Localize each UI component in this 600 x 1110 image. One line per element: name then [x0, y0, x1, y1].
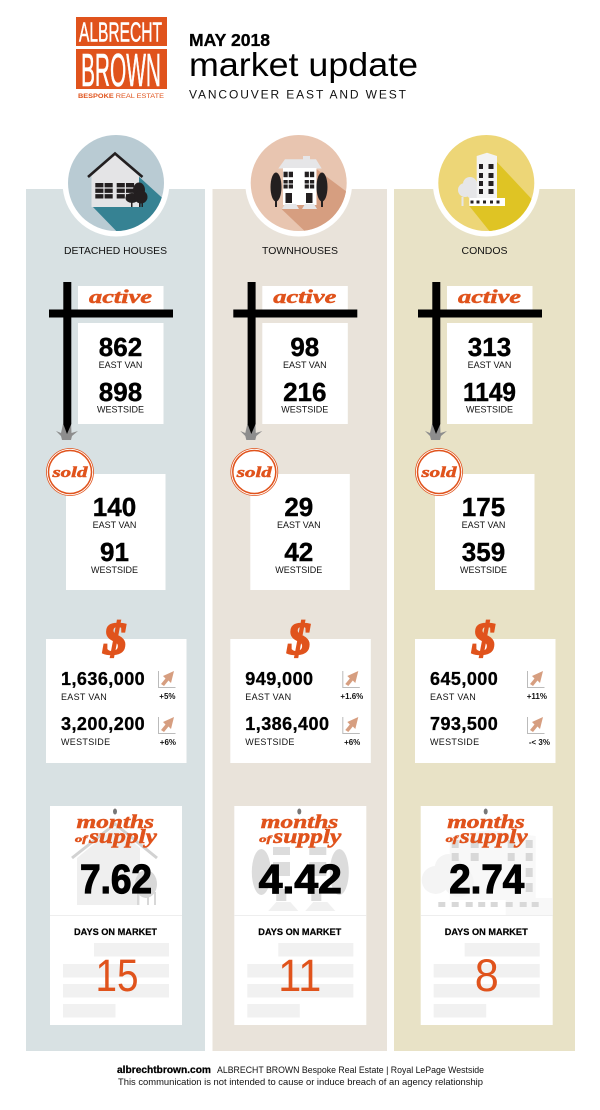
supply and days on market: detached houses — [50, 806, 182, 1025]
supply and days on market: condos: of — [446, 834, 459, 844]
prices: detached houses: $ — [102, 613, 126, 664]
prices: townhouses: 949,000 — [245, 669, 314, 689]
logo: BESPOKE REAL ESTATE — [78, 93, 165, 100]
sold listings: condos: EAST VAN — [462, 520, 505, 530]
panel: detached houses background — [26, 189, 205, 1051]
heading: condos: CONDOS — [462, 245, 508, 257]
sold listings: condos — [416, 448, 534, 590]
active listings: condos: EAST VAN — [468, 360, 511, 370]
logo: ALBRECHT — [79, 16, 162, 48]
active listings: townhouses — [233, 282, 357, 440]
active listings: condos: WESTSIDE — [466, 404, 513, 414]
title block — [189, 30, 418, 102]
prices: condos: EAST VAN — [430, 692, 476, 702]
prices: condos: 793,500 — [430, 714, 498, 734]
supply and days on market: condos: 2.74 — [449, 856, 524, 902]
supply and days on market: townhouses: 11 — [278, 950, 321, 1001]
active listings: condos — [418, 282, 542, 440]
active listings: detached houses: 862 — [99, 332, 142, 362]
heading: detached houses: DETACHED HOUSES — [64, 245, 167, 257]
active listings: townhouses: active — [273, 287, 337, 308]
sold listings: townhouses — [231, 448, 350, 590]
icon: detached house — [62, 130, 170, 240]
icon: condo tower — [433, 130, 540, 238]
footer: ALBRECHT BROWN Bespoke Real Estate | Royal LePage Westside — [217, 1065, 484, 1076]
heading: townhouses: TOWNHOUSES — [262, 245, 338, 257]
prices: townhouses: +6% — [344, 738, 360, 747]
sold listings: townhouses: WESTSIDE — [275, 565, 322, 575]
active listings: detached houses: EAST VAN — [99, 360, 142, 370]
prices: townhouses: 1,386,400 — [245, 714, 329, 734]
sold listings: condos: 175 — [462, 492, 505, 522]
prices: condos: $ — [472, 613, 496, 664]
text: BROWN — [81, 44, 161, 96]
footer: albrechtbrown.com — [117, 1065, 211, 1076]
sold listings: detached houses: EAST VAN — [93, 520, 136, 530]
sold listings: detached houses — [46, 448, 166, 590]
supply and days on market: detached houses: 15 — [96, 950, 138, 1001]
supply and days on market: condos: DAYS ON MARKET — [445, 927, 528, 937]
prices: detached houses: +6% — [160, 738, 176, 747]
sold listings: detached houses: 140 — [93, 492, 136, 522]
prices: detached houses: WESTSIDE — [61, 737, 110, 747]
logo — [76, 16, 167, 100]
prices: detached houses — [46, 613, 186, 763]
active listings: townhouses: 216 — [283, 377, 326, 407]
supply and days on market: townhouses: DAYS ON MARKET — [258, 927, 342, 937]
sold listings: townhouses: sold — [235, 465, 272, 481]
supply and days on market: detached houses: months — [76, 812, 154, 833]
prices: townhouses: WESTSIDE — [245, 737, 295, 747]
prices: detached houses: 1,636,000 — [61, 669, 145, 689]
supply and days on market: condos: 8 — [475, 950, 499, 1001]
prices: condos: +11% — [527, 692, 547, 701]
supply and days on market: townhouses: of — [259, 834, 273, 844]
sold listings: detached houses: WESTSIDE — [91, 565, 138, 575]
sold listings: townhouses: EAST VAN — [277, 520, 321, 530]
title block: VANCOUVER EAST AND WEST — [189, 88, 407, 102]
active listings: townhouses: EAST VAN — [283, 360, 327, 370]
prices: townhouses: $ — [287, 613, 311, 664]
active listings: condos: 313 — [468, 332, 511, 362]
supply and days on market: condos — [421, 806, 553, 1025]
active listings: detached houses: WESTSIDE — [97, 404, 144, 414]
title block: market update — [189, 46, 418, 83]
prices: townhouses: EAST VAN — [245, 692, 291, 702]
active listings: detached houses — [49, 282, 173, 440]
supply and days on market: townhouses — [234, 806, 366, 1025]
prices: detached houses: EAST VAN — [61, 692, 107, 702]
prices: condos: WESTSIDE — [430, 737, 479, 747]
sold listings: condos: WESTSIDE — [460, 565, 507, 575]
supply and days on market: detached houses: DAYS ON MARKET — [74, 927, 158, 937]
prices: condos: -< 3% — [529, 738, 550, 747]
sold listings: townhouses: 29 — [284, 492, 313, 522]
supply and days on market: condos: supply — [458, 826, 528, 848]
title block: MAY 2018 — [189, 30, 270, 50]
icon: townhouse — [245, 130, 355, 238]
active listings: condos: active — [458, 287, 522, 308]
active listings: detached houses: 898 — [99, 377, 142, 407]
sold listings: condos: 359 — [462, 537, 505, 567]
panel: condos background — [394, 189, 575, 1051]
sold listings: townhouses: 42 — [284, 537, 313, 567]
active listings: townhouses: WESTSIDE — [281, 404, 328, 414]
sold listings: condos: sold — [420, 465, 457, 481]
sold listings: detached houses: sold — [51, 465, 88, 481]
supply and days on market: detached houses: 7.62 — [80, 856, 152, 902]
supply and days on market: detached houses: of — [75, 834, 89, 844]
footer — [117, 1065, 484, 1088]
active listings: townhouses: 98 — [290, 332, 319, 362]
prices: townhouses: +1.6% — [340, 692, 363, 701]
active listings: detached houses: active — [89, 287, 153, 308]
prices: condos: 645,000 — [430, 669, 498, 689]
supply and days on market: townhouses: 4.42 — [259, 856, 342, 902]
supply and days on market: condos: months — [447, 812, 525, 833]
supply and days on market: townhouses: months — [261, 812, 338, 833]
prices: condos — [415, 613, 556, 763]
supply and days on market: townhouses: supply — [272, 826, 341, 848]
prices: detached houses: 3,200,200 — [61, 714, 145, 734]
prices: detached houses: +5% — [159, 692, 176, 701]
prices: townhouses — [230, 613, 371, 763]
sold listings: detached houses: 91 — [100, 537, 129, 567]
supply and days on market: detached houses: supply — [88, 826, 157, 848]
footer: This communication is not intended to cause or induce breach of an agency relationship — [118, 1077, 483, 1088]
active listings: condos: 1149 — [463, 377, 516, 407]
panel: townhouses background — [212, 189, 387, 1051]
